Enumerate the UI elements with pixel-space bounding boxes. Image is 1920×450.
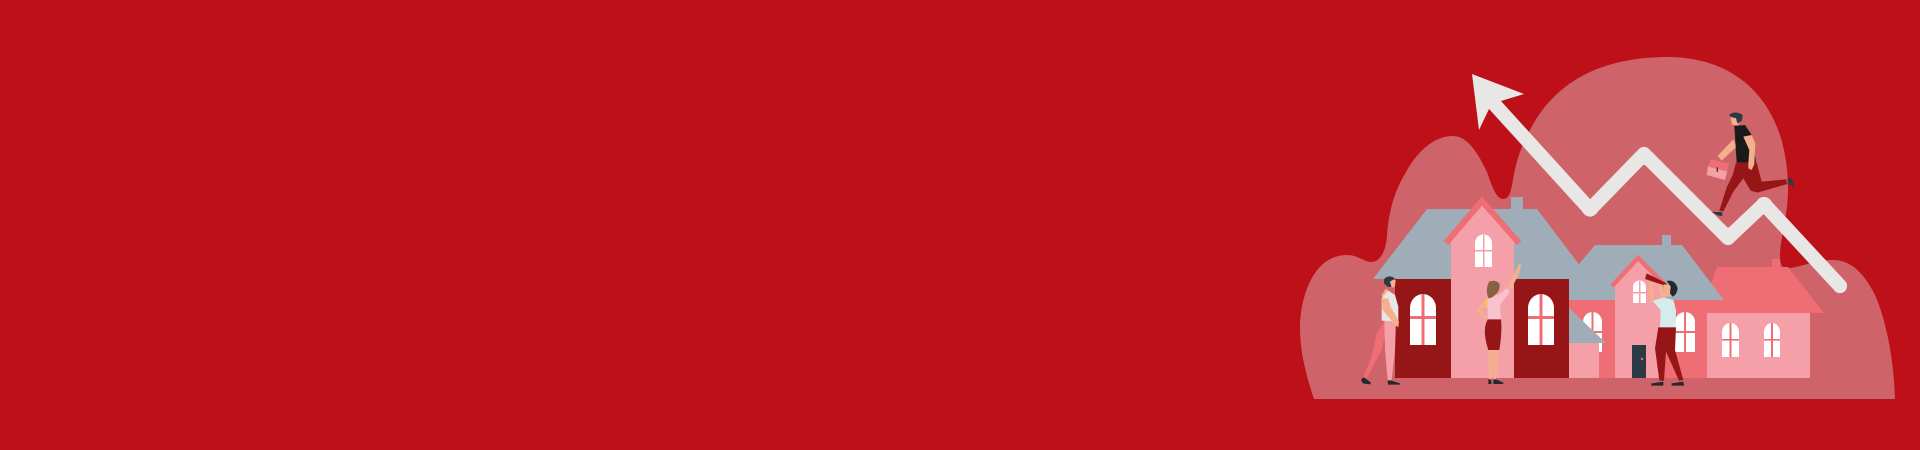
- main roof: [1373, 209, 1590, 279]
- house 2 door: [1632, 345, 1646, 378]
- main tower: [1451, 203, 1514, 378]
- main tower window: [1475, 234, 1492, 267]
- right dark wing: [1514, 279, 1569, 378]
- house 3 roof: [1700, 259, 1824, 313]
- house 2 chimney: [1662, 235, 1671, 247]
- house 2 right window: [1675, 312, 1695, 352]
- main tower roof: [1446, 201, 1519, 243]
- right wing window: [1528, 294, 1554, 345]
- left dark wing: [1395, 279, 1451, 378]
- house: second gray-roof house: [1555, 235, 1824, 378]
- arrow: zigzag trend line: [1472, 74, 1840, 286]
- house 2 left window: [1583, 312, 1602, 352]
- lean-to pink wall: [1569, 343, 1599, 378]
- main chimney: [1511, 197, 1523, 211]
- briefcase: [1707, 159, 1729, 180]
- house 3 wall: [1707, 313, 1810, 378]
- house 2 salmon wall: [1569, 300, 1707, 378]
- person: man with telescope: [1645, 273, 1684, 386]
- house 2 tower: [1615, 259, 1663, 378]
- person: man standing left: [1361, 276, 1400, 385]
- person: running man with briefcase: [1707, 112, 1795, 216]
- house 3 left window: [1722, 323, 1739, 357]
- house 2 roof: [1555, 245, 1724, 300]
- background blob: [1300, 57, 1895, 399]
- house 2 tower roof: [1612, 258, 1666, 286]
- house: large main house: [1373, 197, 1590, 378]
- lean-to roof: [1569, 308, 1606, 343]
- arrow head: [1472, 74, 1524, 130]
- person: woman pointing up: [1476, 263, 1521, 384]
- left wing window: [1410, 294, 1436, 345]
- house 2 tower window: [1633, 280, 1646, 303]
- house 3 right window: [1764, 323, 1780, 357]
